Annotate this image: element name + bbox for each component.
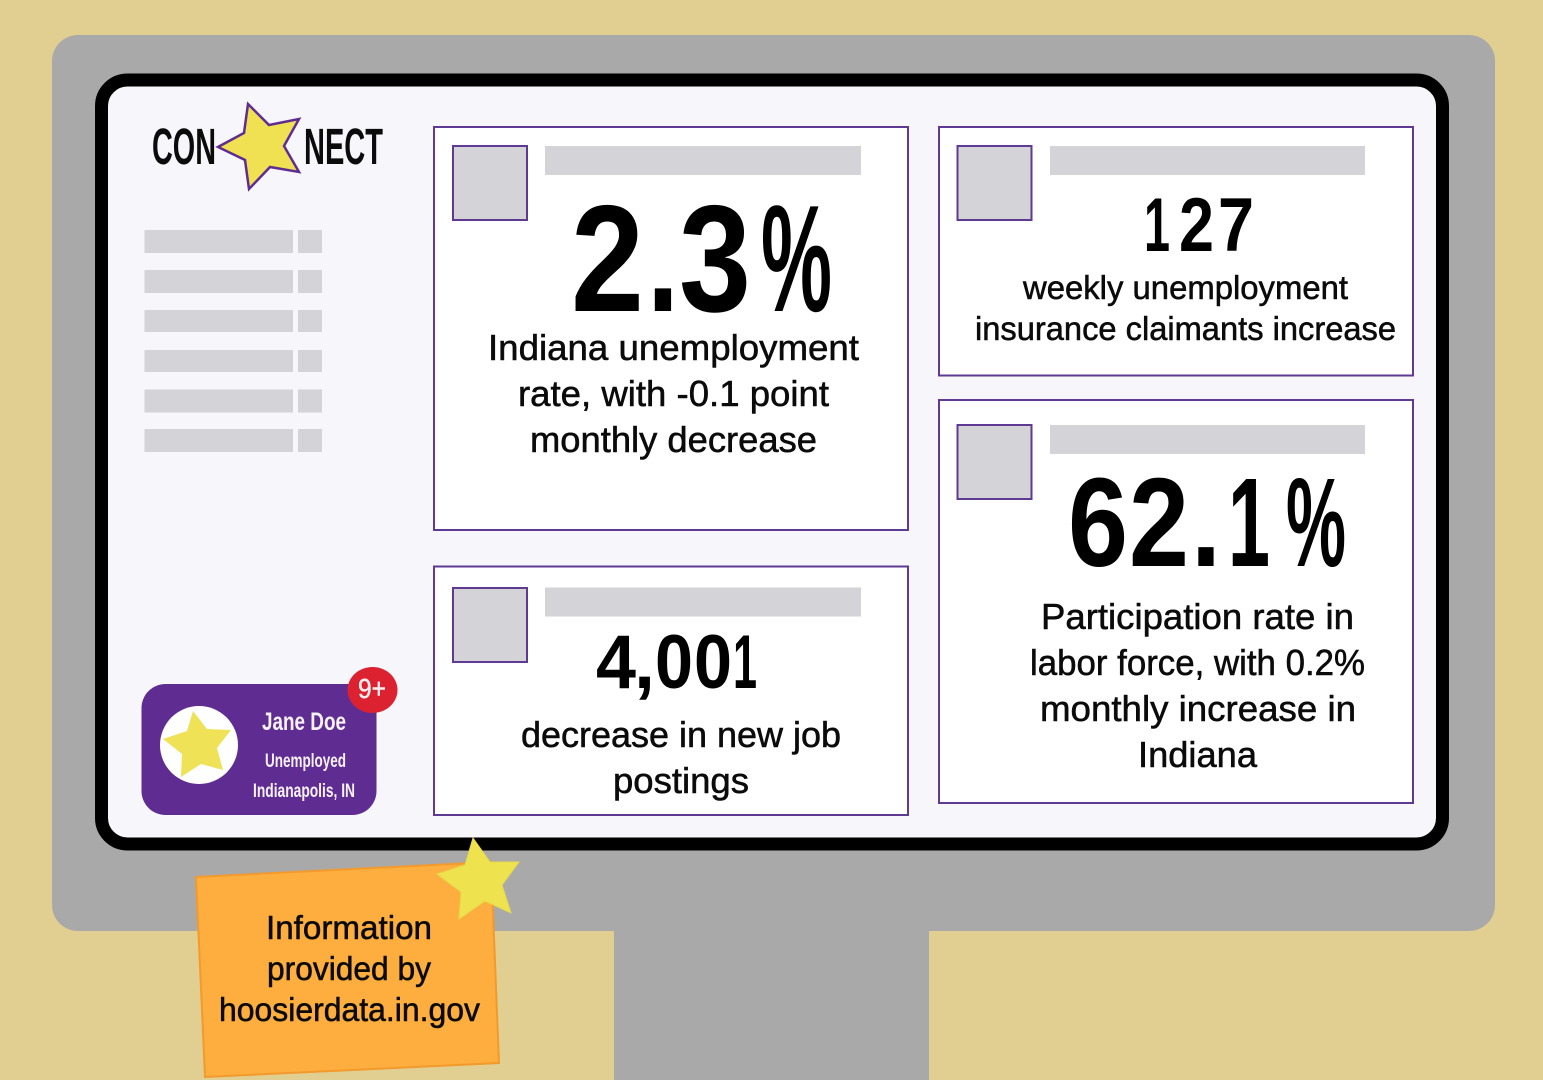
stat: 127: 2	[1179, 183, 1214, 268]
text: unemployment description	[488, 327, 859, 460]
panel: job postings	[434, 566, 908, 815]
stat: 4,001	[596, 620, 757, 705]
stat: 2.3%: 3	[679, 174, 751, 344]
panel: weekly claimants	[939, 127, 1413, 376]
text: unemployment description: Indiana unemployment	[488, 327, 859, 368]
stat: 62.1%: .	[1191, 452, 1221, 593]
sidebar menu placeholders	[144, 230, 322, 452]
text: source credit: hoosierdata.in.gov	[219, 991, 480, 1028]
text: participation description: Indiana	[1138, 734, 1258, 775]
text: job postings description: postings	[613, 760, 749, 801]
stat: 127: 1	[1144, 183, 1170, 268]
monitor stand	[614, 925, 929, 1080]
stat: 127	[1144, 183, 1254, 268]
stat: 62.1%	[1068, 452, 1346, 593]
text: participation description: labor force, with 0.2%	[1030, 642, 1365, 683]
logo: CONNECT: NECT	[304, 118, 383, 175]
stat: 4,001: 0	[694, 620, 732, 705]
icon: logo star	[218, 104, 299, 189]
profile card: Jane Doe: Indianapolis, IN	[253, 781, 355, 802]
stat: 2.3%: .	[647, 174, 679, 344]
callout: sticky note source	[196, 838, 519, 1077]
monitor body	[52, 35, 1495, 931]
notification badge: 9+	[358, 673, 386, 704]
stat: 62.1%: 6	[1068, 452, 1128, 593]
profile card: Jane Doe	[142, 667, 398, 815]
logo: CONNECT: CON	[152, 118, 216, 175]
text: participation description: monthly increase in	[1040, 688, 1356, 729]
text: job postings description: decrease in new job	[521, 714, 841, 755]
monitor screen	[102, 80, 1442, 844]
icon: profile avatar star	[160, 706, 238, 784]
stat: 4,001: 1	[733, 620, 757, 705]
text: participation description: Participation rate in	[1041, 596, 1354, 637]
stat: 4,001: ,	[634, 620, 655, 705]
text: participation description	[1030, 596, 1365, 775]
stat: 62.1%: %	[1286, 452, 1346, 593]
profile card: Jane Doe: Jane Doe	[262, 708, 346, 736]
text: unemployment description: rate, with -0.1 point	[518, 373, 829, 414]
stat: 2.3%: %	[761, 174, 832, 344]
stat: 2.3%: 2	[571, 174, 644, 344]
text: claimants description	[975, 269, 1396, 347]
text: claimants description: weekly unemployment	[1022, 269, 1348, 306]
notification badge	[348, 667, 398, 713]
profile card: Jane Doe: Unemployed	[265, 751, 346, 772]
stat: 62.1%: 1	[1228, 452, 1270, 593]
stat: 4,001: 4	[596, 620, 636, 705]
stat: 2.3%	[571, 174, 832, 344]
text: claimants description: insurance claimants increase	[975, 310, 1396, 347]
logo: CONNECT	[152, 104, 383, 189]
text: source credit: provided by	[267, 950, 431, 987]
text: source credit	[219, 909, 480, 1028]
stat: 127: 7	[1218, 183, 1254, 268]
stat: 62.1%: 2	[1129, 452, 1189, 593]
panel: unemployment rate	[434, 127, 908, 530]
text: unemployment description: monthly decrease	[530, 419, 817, 460]
text: job postings description	[521, 714, 841, 801]
panel: labor force participation	[939, 400, 1413, 803]
stat: 4,001: 0	[655, 620, 693, 705]
text: source credit: Information	[266, 909, 432, 946]
icon: pinned star	[437, 838, 519, 919]
